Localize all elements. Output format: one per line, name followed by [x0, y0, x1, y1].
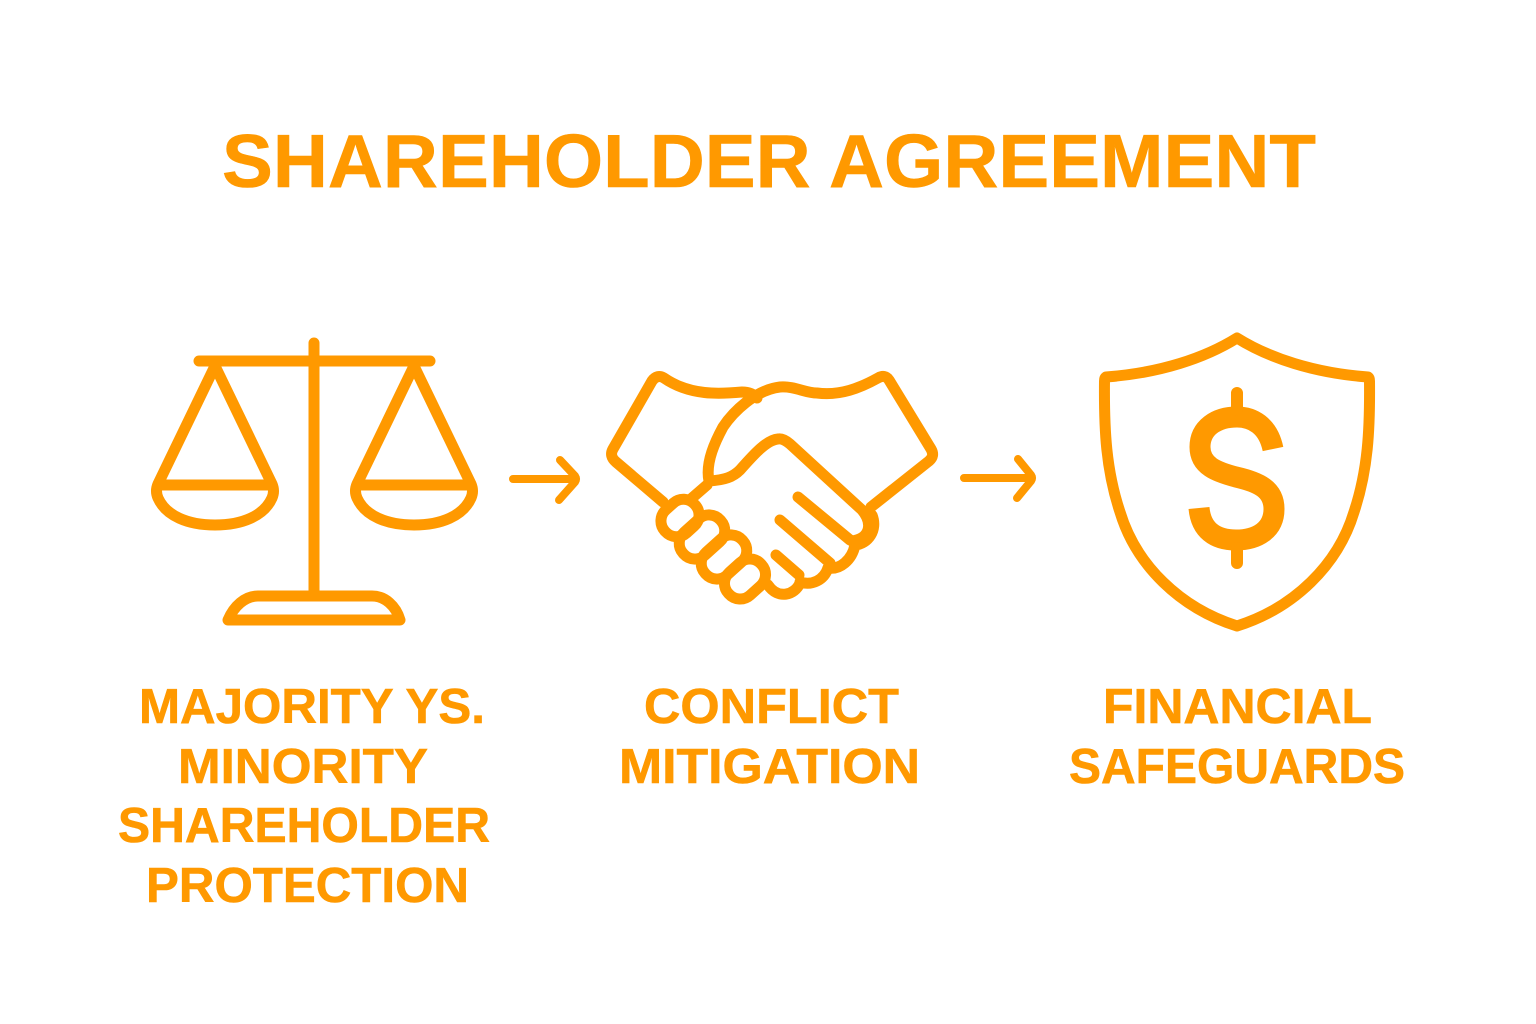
- label: conflict mitigation: MITIGATION: [619, 740, 920, 794]
- arrow: handshake to shield: [964, 459, 1032, 498]
- shield outline: [1104, 338, 1370, 626]
- label: majority vs minority: SHAREHOLDER: [118, 799, 490, 853]
- label: financial safeguards: [1069, 680, 1405, 794]
- label: majority vs minority: MINORITY: [178, 740, 428, 794]
- label: majority vs minority: MAJORITY YS.: [139, 680, 485, 734]
- title: SHAREHOLDER AGREEMENT: [222, 119, 1316, 203]
- label: conflict mitigation: CONFLICT: [644, 680, 899, 734]
- label: majority vs minority: PROTECTION: [146, 859, 469, 913]
- dollar sign: [1199, 393, 1274, 563]
- label: conflict mitigation: [619, 680, 920, 794]
- icon: handshake: [612, 376, 933, 605]
- label: financial safeguards: FINANCIAL: [1103, 680, 1372, 734]
- label: majority vs minority: [118, 680, 490, 913]
- icon: shield with dollar: [1104, 338, 1370, 626]
- icon: balance scales: [156, 343, 472, 620]
- arrow: scales to handshake: [513, 460, 576, 500]
- label: financial safeguards: SAFEGUARDS: [1069, 740, 1405, 794]
